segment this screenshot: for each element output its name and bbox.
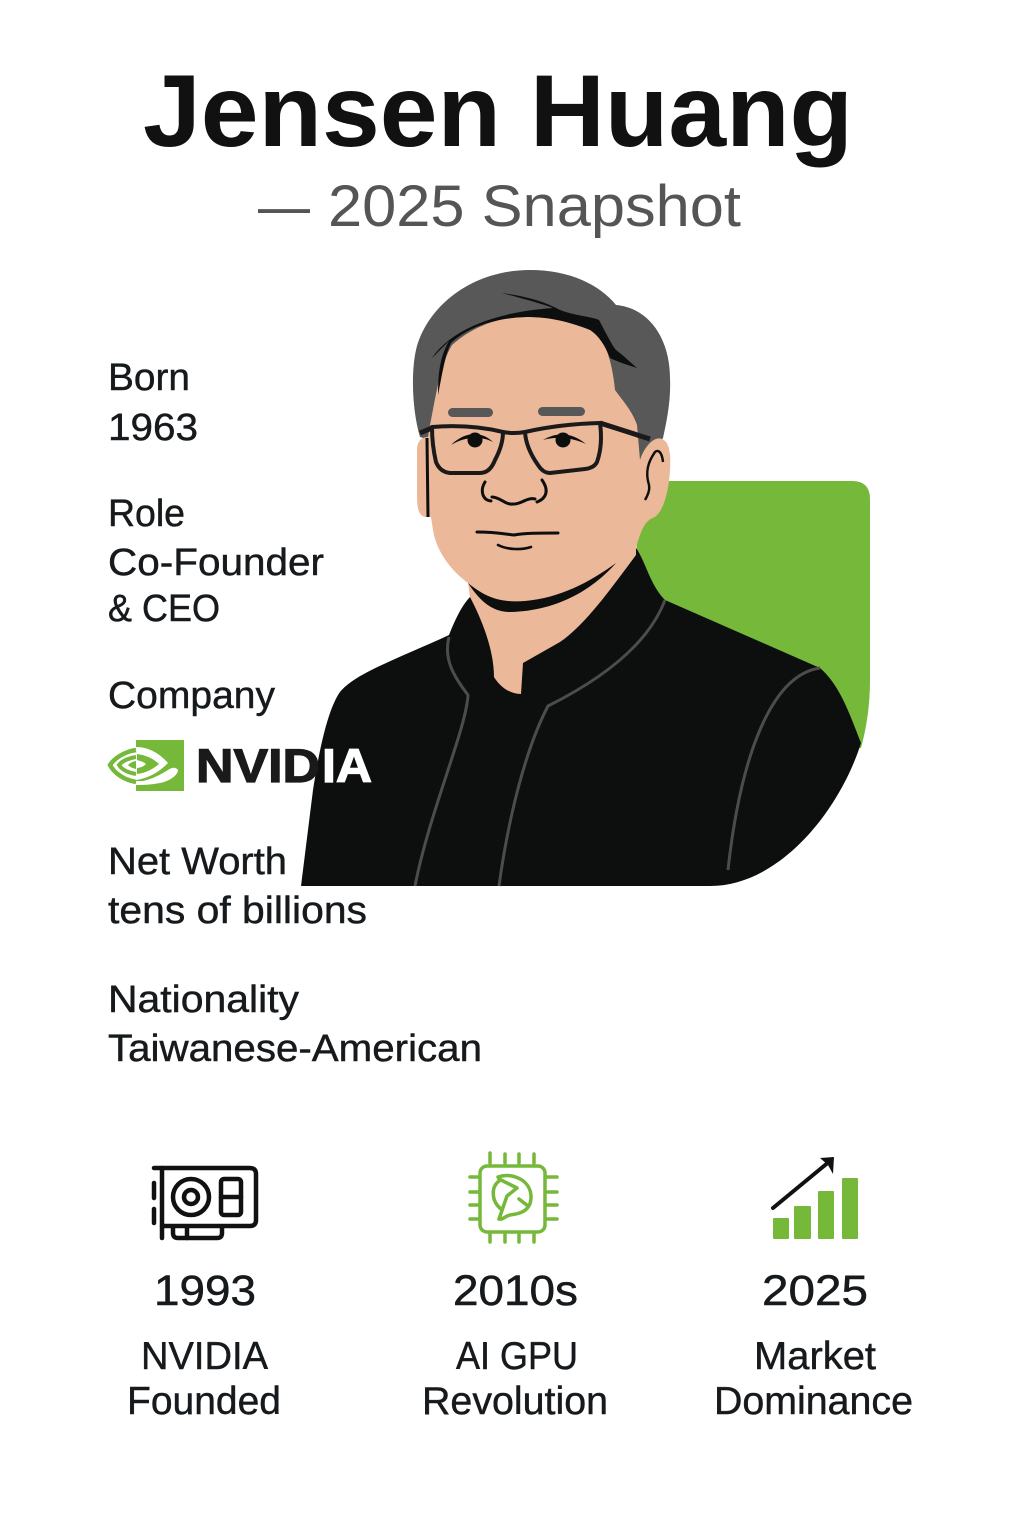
fact: net worth: tens of billions — [108, 890, 367, 932]
fact: born: Born — [108, 357, 190, 399]
icon: growth chart — [773, 1157, 858, 1239]
logo wordmark: NVID — [196, 739, 320, 792]
subtitle: 2025 Snapshot — [328, 174, 741, 239]
subtitle: — — [258, 174, 310, 239]
fact: company: Company — [108, 675, 275, 717]
eyebrows — [448, 408, 493, 417]
milestone: 1993 — [127, 1168, 281, 1423]
caption — [422, 1335, 608, 1423]
fact: nationality — [108, 979, 482, 1070]
hair — [413, 270, 670, 470]
ear detail — [645, 451, 663, 500]
fact: net worth: Net Worth — [108, 841, 287, 883]
green backdrop panel — [636, 481, 870, 760]
glasses — [420, 423, 650, 473]
caption — [714, 1335, 913, 1423]
fact: nationality: Nationality — [108, 979, 299, 1021]
fact: role: Role — [108, 493, 185, 535]
fact: role: Co-Founder — [108, 542, 324, 584]
fact: role: & CEO — [108, 588, 220, 630]
chin shadow — [468, 563, 616, 612]
icon: graphics card — [154, 1168, 256, 1238]
fact: nationality: Taiwanese-American — [108, 1028, 482, 1070]
fact: born — [108, 357, 198, 449]
portrait illustration — [301, 270, 870, 886]
face and neck — [417, 317, 670, 694]
logo eye mark — [110, 740, 184, 791]
eyes — [451, 432, 586, 448]
year: 2010s — [453, 1267, 578, 1315]
title: Jensen Huang — [143, 54, 853, 168]
jacket seams — [415, 600, 820, 886]
year: 1993 — [154, 1267, 256, 1315]
mouth — [477, 532, 558, 549]
caption — [127, 1335, 281, 1423]
caption: NVIDIA — [141, 1335, 268, 1378]
icon: AI chip — [470, 1153, 557, 1242]
year: 2025 — [762, 1267, 868, 1315]
milestone: 2010s — [422, 1153, 608, 1423]
left face line — [427, 438, 428, 517]
fact: role — [108, 493, 324, 630]
NVIDIA logo — [110, 739, 372, 792]
caption: Revolution — [422, 1380, 608, 1423]
hair strands — [432, 293, 637, 395]
NVIDIA logo: IA — [322, 739, 372, 792]
fact: net worth — [108, 841, 367, 932]
caption: Dominance — [714, 1380, 913, 1423]
fact: born: 1963 — [108, 407, 198, 449]
nose — [482, 480, 546, 504]
caption: AI GPU — [456, 1335, 578, 1378]
caption: Market — [754, 1335, 876, 1378]
milestone: 2025 — [714, 1157, 913, 1423]
caption: Founded — [127, 1380, 281, 1423]
jacket — [301, 548, 861, 886]
